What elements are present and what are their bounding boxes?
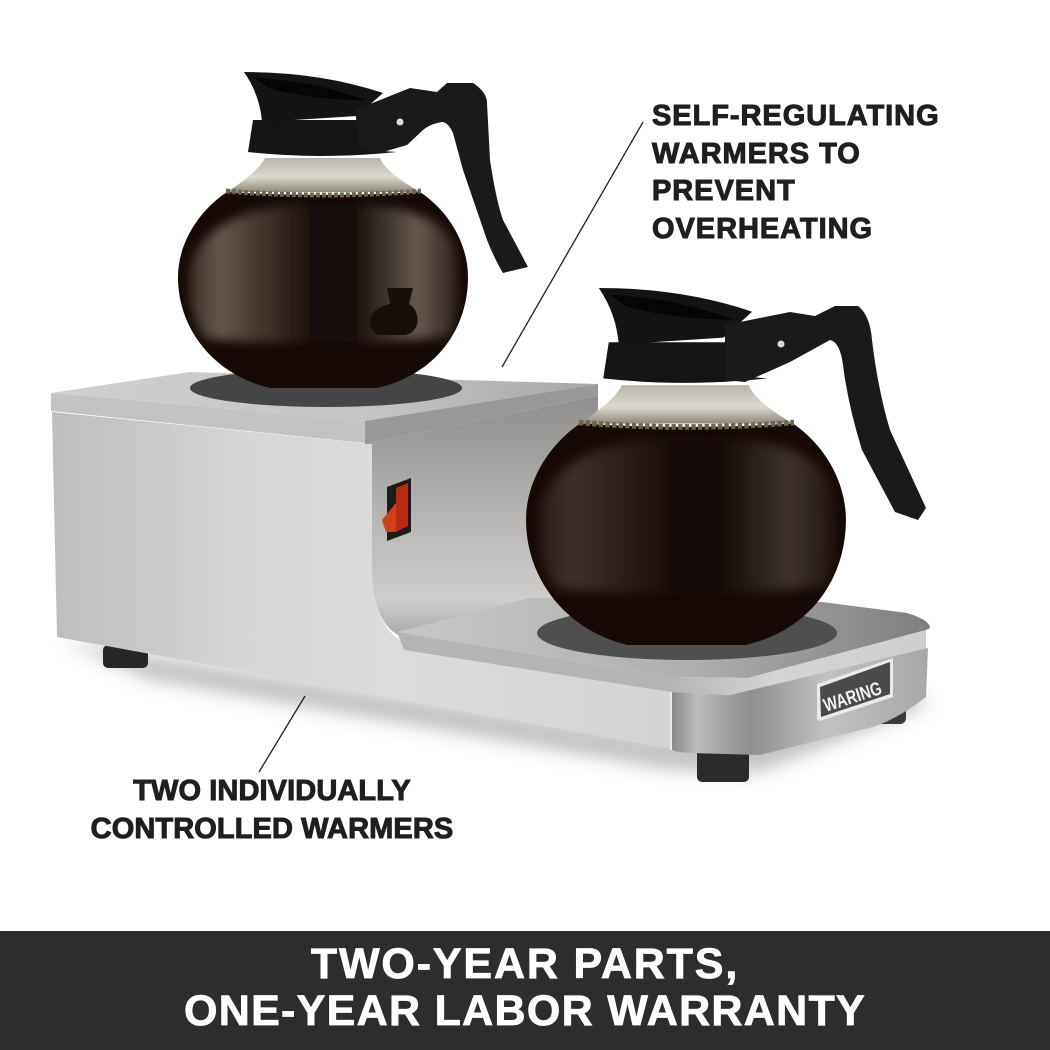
reflections — [539, 436, 835, 594]
callout: self-regulating warmers: SELF-REGULATING — [652, 100, 940, 132]
warranty text: TWO-YEAR PARTS, — [311, 940, 739, 988]
hot plate: top — [190, 369, 462, 407]
callout: individually controlled: TWO INDIVIDUALLY — [133, 775, 411, 807]
decanter top — [178, 72, 528, 388]
seam — [670, 692, 672, 750]
hot plate: bottom — [537, 606, 837, 660]
leader line: two warmers — [259, 696, 305, 772]
Waring badge — [817, 658, 893, 721]
spout — [244, 72, 383, 122]
leader line: self-regulating — [502, 122, 643, 367]
handle hole — [778, 340, 784, 348]
decanter bottom — [526, 288, 926, 645]
coffee body — [178, 192, 468, 388]
callout: individually controlled: CONTROLLED WARMERS — [91, 812, 453, 844]
spout inner — [610, 295, 733, 320]
warranty text — [184, 940, 866, 1035]
lower plate front lip — [672, 648, 928, 755]
product illustration: warmer with two decanters — [51, 72, 930, 782]
shadow under warmer — [60, 640, 930, 772]
handle — [725, 306, 926, 520]
lower plate light band — [397, 630, 926, 695]
lower plate — [397, 598, 930, 678]
warmer tall body side — [365, 396, 598, 636]
warmer feet — [103, 645, 906, 782]
Waring badge: WARING — [821, 678, 885, 717]
foam line — [226, 191, 421, 195]
handle hole — [396, 118, 404, 126]
reflections — [190, 203, 458, 343]
top plate side edge — [365, 384, 598, 444]
foam line — [579, 422, 794, 427]
callout: individually controlled — [91, 775, 453, 844]
warranty text: ONE-YEAR LABOR WARRANTY — [184, 987, 866, 1035]
spout — [599, 288, 752, 344]
coffee body — [526, 424, 846, 645]
callout: self-regulating warmers: WARMERS TO — [652, 138, 861, 170]
collar — [248, 120, 397, 156]
callout: self-regulating warmers: PREVENT — [652, 175, 796, 207]
footer band: warranty — [0, 931, 1050, 1050]
spout inner — [254, 78, 366, 100]
callout: self-regulating warmers: OVERHEATING — [652, 212, 873, 244]
glass neck and shoulder — [227, 158, 420, 192]
top plate — [51, 372, 598, 421]
warmer tall body front — [52, 412, 672, 749]
rocker switch — [382, 478, 411, 541]
collar — [603, 342, 768, 383]
glass neck and shoulder — [580, 385, 793, 424]
handle — [355, 83, 528, 273]
callout: self-regulating warmers — [651, 100, 940, 244]
top plate front edge — [51, 393, 365, 443]
